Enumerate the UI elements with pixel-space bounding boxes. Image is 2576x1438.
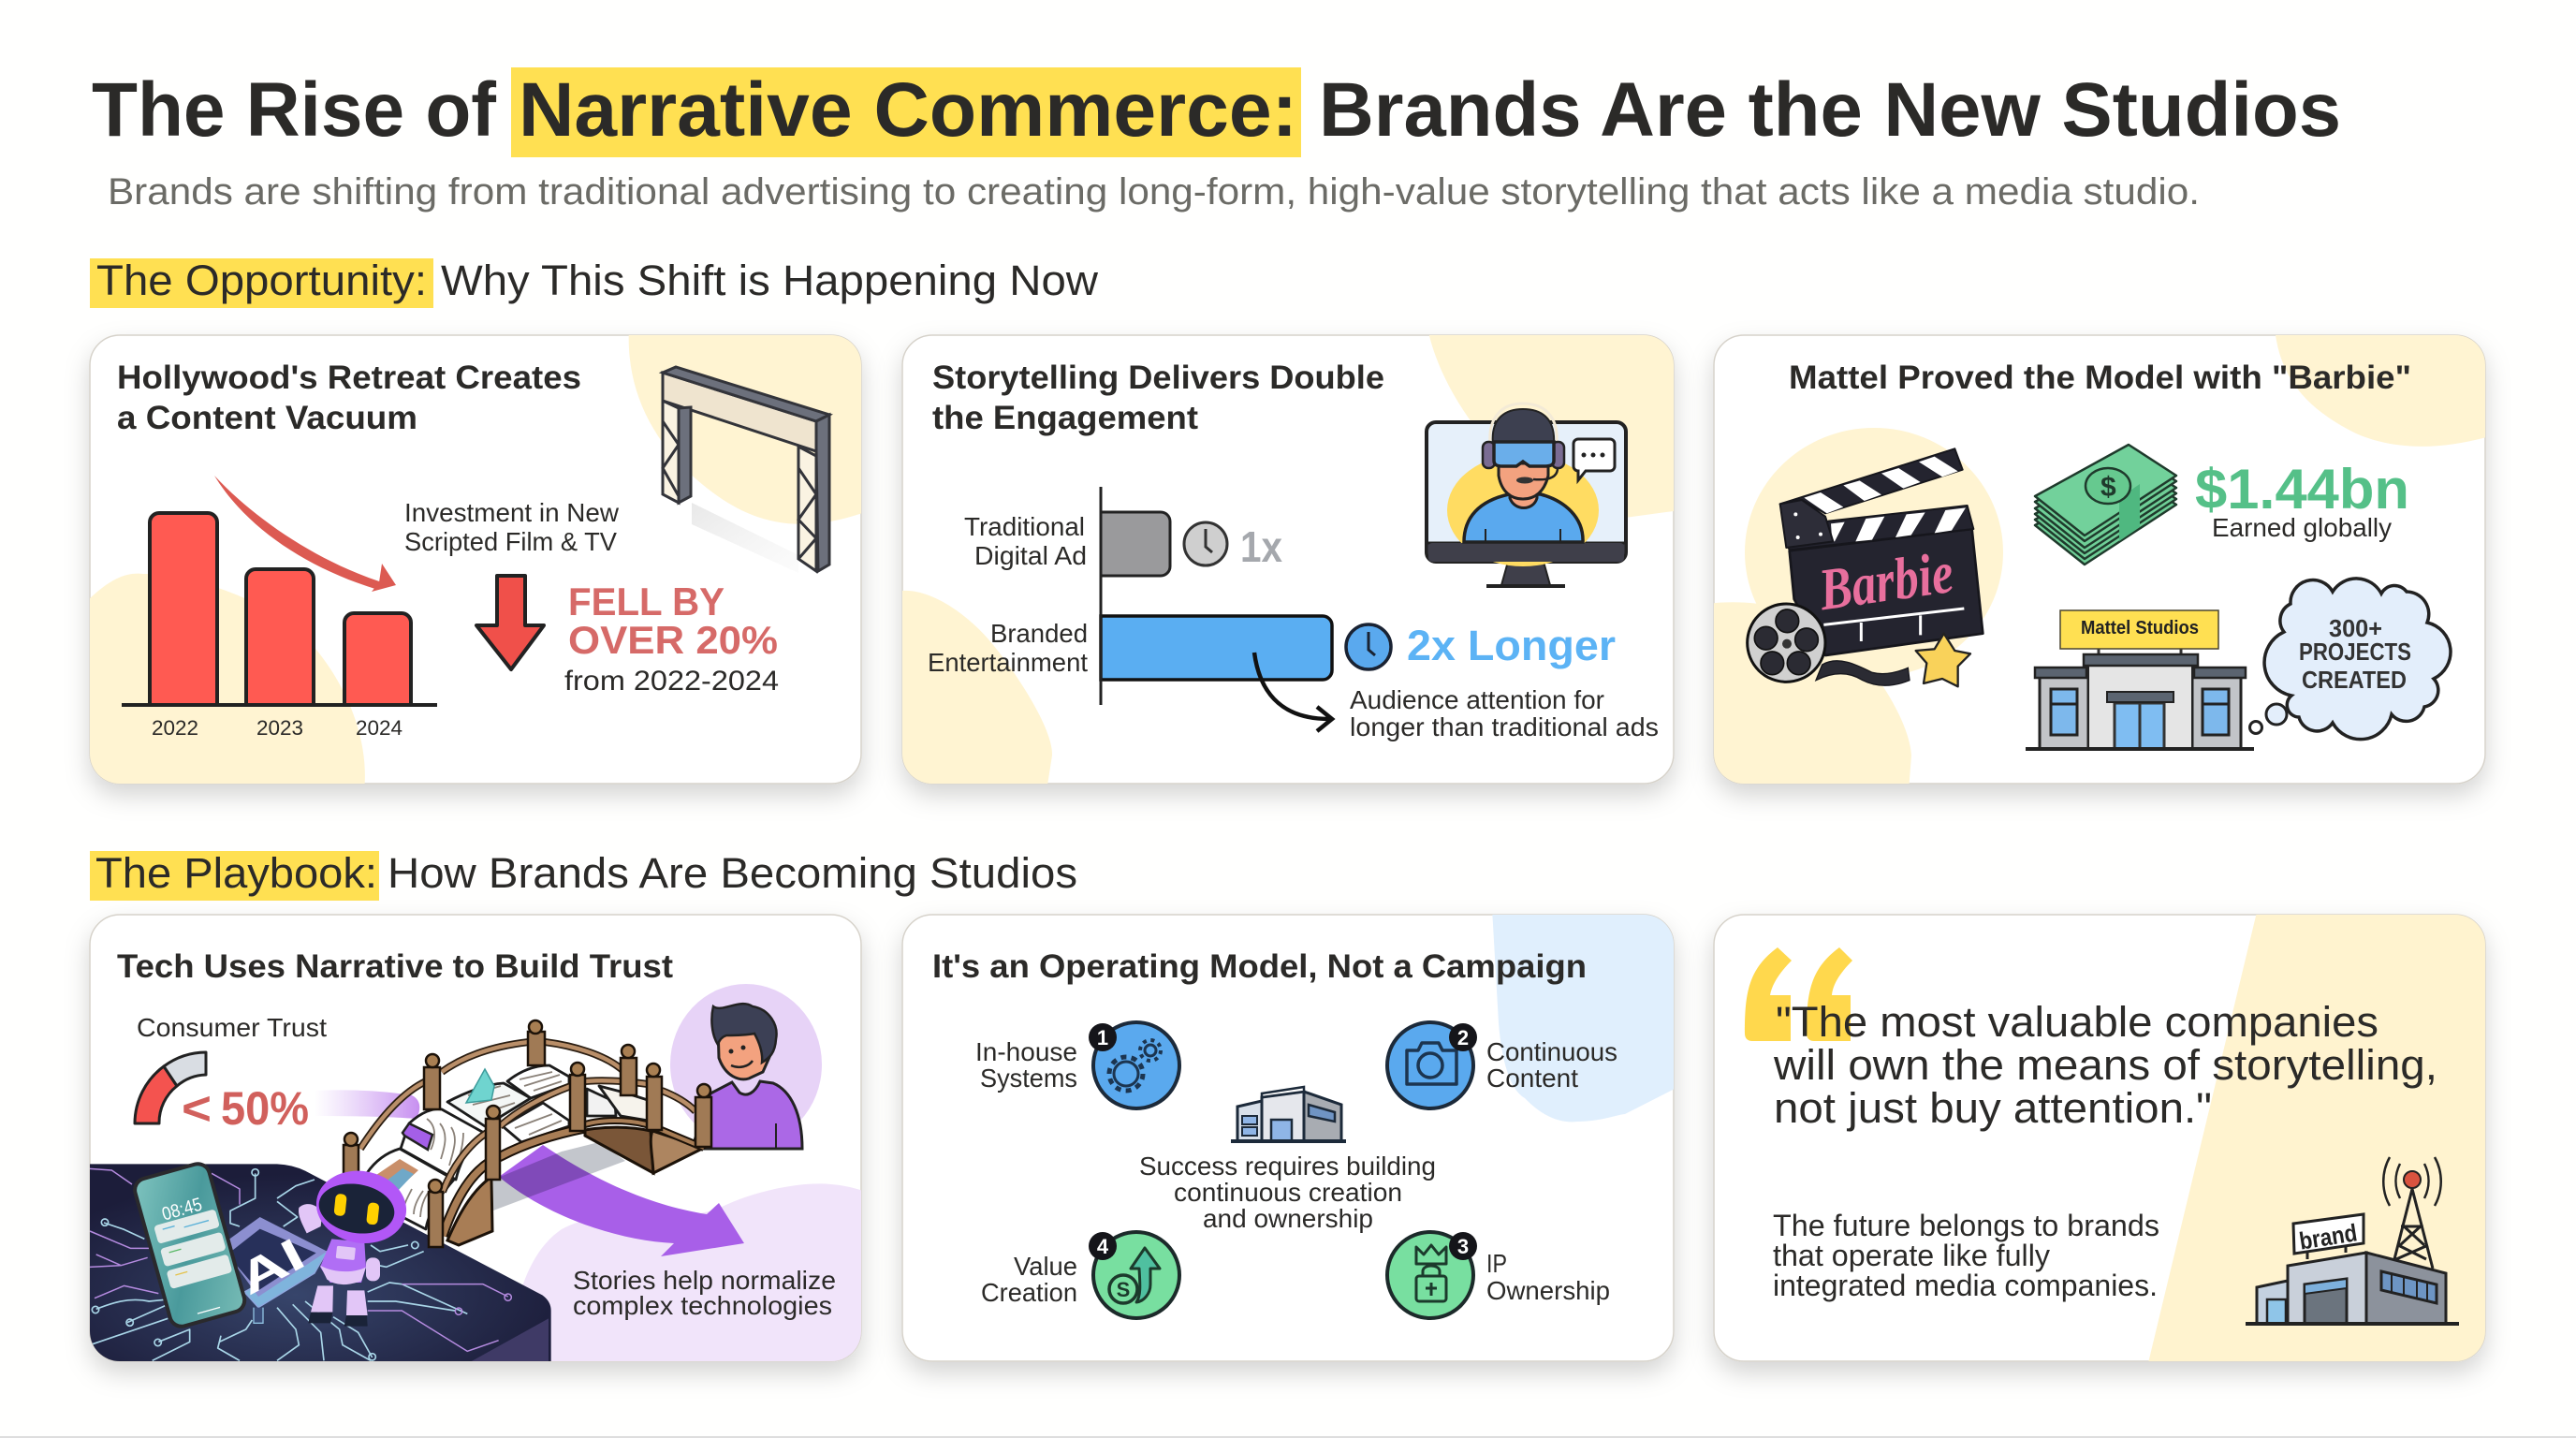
callout: 300+ projects created (2250, 579, 2451, 740)
icon: clock 2x (1346, 624, 1391, 669)
icon: ip ownership: 3 (1457, 1235, 1469, 1258)
text: center message (1139, 1152, 1436, 1233)
callout: 300+ projects created: CREATED (2302, 666, 2407, 694)
heading: Storytelling Delivers Double (932, 360, 1384, 396)
back rail (360, 1042, 622, 1149)
arrow: purple flow (493, 1142, 744, 1256)
heading: a Content Vacuum (117, 400, 417, 436)
text: quote: will own the means of storytelling, (1773, 1041, 2437, 1089)
text: center message: continuous creation (1174, 1178, 1402, 1207)
front rail (443, 1080, 695, 1192)
stat: $1.44bn: Earned globally (2212, 513, 2392, 542)
arrow: downward trend (214, 476, 396, 592)
icon: ip ownership (1387, 1232, 1477, 1318)
icon: person with vr headset on monitor (1427, 404, 1626, 586)
circuit board (87, 1164, 551, 1365)
text: stories note (573, 1266, 836, 1320)
text: center message: Success requires building (1139, 1152, 1436, 1181)
icon: quotation marks (1745, 947, 1852, 1041)
deck arch (443, 1128, 585, 1236)
heading (932, 360, 1384, 436)
heading: Tech Uses Narrative to Build Trust (117, 948, 673, 985)
bar chart: attention comparison (928, 487, 1332, 705)
section heading: the playbook: How Brands Are Becoming Studios (388, 849, 1077, 897)
icon: film set gate (663, 367, 829, 573)
subtitle: Brands are shifting from traditional advertising to creating long-form, high-value storytelling that acts like a media studio. (108, 171, 2200, 213)
icon: barbie clapperboard with film reel: Barbie (1814, 539, 1957, 623)
icon: brand media building with tower: brand (2297, 1218, 2359, 1255)
bar chart: investment 2022-2024 (122, 513, 437, 740)
icon: money stack: $ (2100, 472, 2116, 503)
text: closing statement: integrated media companies. (1773, 1269, 2158, 1302)
section heading: the playbook (90, 849, 1077, 901)
icon: star (1916, 634, 1970, 686)
text: investment label: Scripted Film & TV (404, 527, 617, 556)
circuit board: AI (230, 1229, 313, 1305)
heading: the Engagement (932, 400, 1198, 436)
label: in-house systems (975, 1037, 1077, 1093)
stat: under 50%: < (182, 1082, 212, 1135)
teal tent (466, 1069, 494, 1103)
icon: money stack (2035, 445, 2176, 565)
callout: 300+ projects created: 300+ (2329, 614, 2382, 642)
bar chart: attention comparison: Digital Ad (974, 541, 1087, 570)
arrow: to note (1254, 653, 1332, 731)
icon: bridge of books (344, 1020, 711, 1247)
bar chart: investment 2022-2024: 2024 (356, 716, 402, 740)
text: closing statement: that operate like fully (1773, 1239, 2050, 1272)
gauge: consumer trust (135, 1052, 206, 1123)
stat: fell by over 20%: OVER 20% (568, 618, 778, 662)
label: ip ownership: IP (1486, 1249, 1507, 1278)
text: attention note: longer than traditional ads (1350, 712, 1659, 741)
icon: value creation (1089, 1232, 1179, 1318)
text: quote: not just buy attention." (1774, 1084, 2212, 1132)
text: quote (1773, 998, 2437, 1132)
book tab (402, 1123, 432, 1150)
title: The Rise of (92, 67, 497, 153)
stat: 1x: 1x (1240, 522, 1282, 571)
icon: value creation: 4 (1097, 1235, 1109, 1258)
icon: continuous content (1387, 1022, 1477, 1108)
panel: operating model (902, 908, 1680, 1361)
panel: storytelling engagement (897, 328, 1680, 791)
stat: fell by over 20%: FELL BY (568, 580, 724, 624)
icon: robot (299, 1164, 412, 1327)
panel: tech uses narrative (87, 915, 871, 1367)
icon: company building (1231, 1087, 1346, 1141)
icon: phone: 08:45 (160, 1195, 204, 1225)
heading: Hollywood's Retreat Creates (117, 360, 581, 396)
panel: hollywood's retreat (84, 328, 871, 791)
bar chart: attention comparison: Entertainment (928, 648, 1088, 677)
text: center message: and ownership (1203, 1204, 1373, 1233)
icon: phone (132, 1161, 247, 1329)
icon: value creation: S (1117, 1278, 1130, 1301)
stat: $1.44bn: $1.44bn (2195, 458, 2409, 521)
band: connection to bridge (315, 1090, 419, 1119)
text: investment label: Investment in New (404, 498, 620, 527)
icon: in-house systems (1089, 1022, 1179, 1108)
text: closing statement: The future belongs to brands (1773, 1209, 2159, 1242)
label: value creation (981, 1252, 1077, 1307)
stat: 2x longer: 2x Longer (1407, 622, 1616, 669)
label: value creation: Creation (981, 1278, 1077, 1307)
section heading: the opportunity: Why This Shift is Happening Now (441, 257, 1099, 304)
label: continuous content (1486, 1037, 1617, 1093)
section heading: the opportunity (90, 257, 1099, 308)
stat: under 50% (182, 1082, 309, 1135)
title: Narrative Commerce: (519, 67, 1297, 153)
text: stories note: Stories help normalize (573, 1266, 836, 1295)
stat: fell by over 20%: from 2022-2024 (564, 666, 779, 697)
text: closing statement (1773, 1209, 2159, 1302)
text: attention note (1350, 685, 1659, 741)
bar chart: investment 2022-2024: 2023 (256, 716, 303, 740)
icon: barbie clapperboard with film reel (1748, 448, 1983, 686)
bar chart: attention comparison: Branded (990, 619, 1088, 648)
posts (344, 1032, 711, 1247)
bar chart: investment 2022-2024: 2022 (152, 716, 198, 740)
title: Brands Are the New Studios (1319, 67, 2341, 153)
stat: under 50%: 50% (221, 1082, 309, 1135)
heading: Mattel Proved the Model with "Barbie" (1789, 360, 2411, 396)
section heading: the playbook: The Playbook: (95, 849, 377, 897)
panel: mattel barbie (1708, 328, 2490, 791)
panel: quote (1714, 908, 2490, 1367)
icon: continuous content: 2 (1457, 1026, 1469, 1049)
text: consumer trust: Consumer Trust (137, 1013, 327, 1042)
heading: It's an Operating Model, Not a Campaign (932, 948, 1587, 985)
title (92, 67, 2341, 157)
heading (117, 360, 581, 436)
section heading: the opportunity: The Opportunity: (96, 257, 427, 304)
text: stories note: complex technologies (573, 1291, 832, 1320)
label: in-house systems: Systems (980, 1064, 1077, 1093)
bar chart: attention comparison: Traditional (964, 512, 1085, 541)
text: investment label (404, 498, 620, 556)
icon: in-house systems: 1 (1097, 1026, 1108, 1049)
stat: fell by over 20% (564, 580, 779, 697)
icon: mattel studios building: Mattel Studios (2081, 618, 2199, 638)
label: continuous content: Continuous (1486, 1037, 1617, 1066)
text: attention note: Audience attention for (1350, 685, 1604, 714)
books (367, 1065, 649, 1229)
label: continuous content: Content (1486, 1064, 1578, 1093)
callout: 300+ projects created: PROJECTS (2299, 638, 2411, 666)
label: ip ownership: Ownership (1486, 1276, 1610, 1305)
icon: clock 1x (1184, 522, 1227, 565)
label: in-house systems: In-house (975, 1037, 1077, 1066)
label: value creation: Value (1014, 1252, 1077, 1281)
text: quote: "The most valuable companies (1776, 998, 2378, 1046)
icon: mattel studios building (2026, 610, 2254, 749)
icon: down arrow (476, 576, 544, 669)
icon: person (692, 1004, 802, 1149)
label: ip ownership (1486, 1249, 1610, 1305)
supports (447, 1177, 492, 1245)
icon: brand media building with tower (2246, 1157, 2459, 1324)
